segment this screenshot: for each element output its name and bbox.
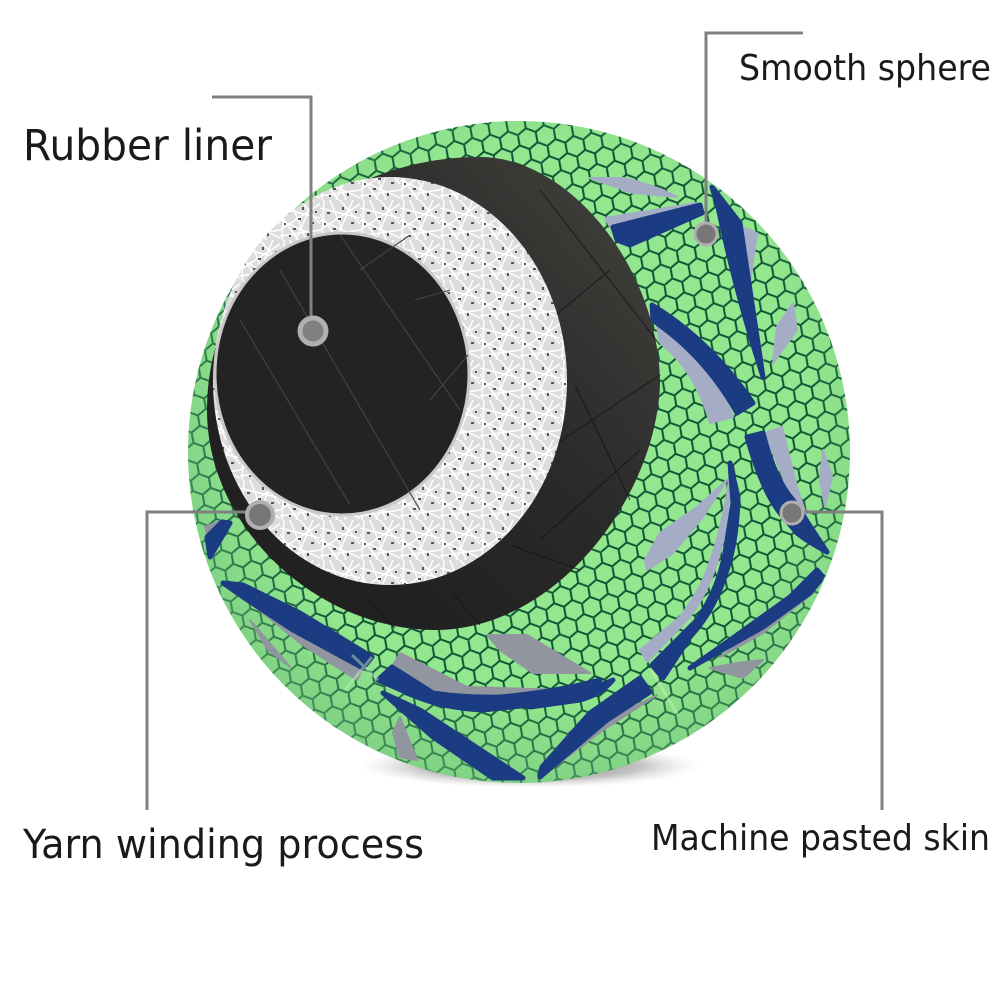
grey markings	[205, 520, 813, 770]
callout: machine pasted skin	[651, 502, 990, 859]
ball surface with hexagon pattern	[188, 121, 850, 783]
silver markings	[590, 178, 832, 662]
edge shading	[188, 121, 850, 783]
navy bands	[207, 187, 827, 778]
rubber panel seams	[367, 190, 660, 628]
callout: rubber liner	[23, 97, 326, 344]
callout: smooth sphere	[695, 33, 991, 245]
callout: rubber liner: Rubber liner	[23, 121, 272, 171]
panel seams	[345, 655, 678, 715]
panel seams on liner	[240, 235, 468, 510]
yarn winding layer	[213, 177, 567, 585]
callout: yarn winding process	[22, 502, 424, 868]
football	[188, 121, 850, 783]
callout: yarn winding process: Yarn winding process	[22, 822, 424, 868]
rubber bladder outer layer	[207, 157, 660, 630]
inner rubber liner	[215, 233, 469, 515]
navy and silver panel markings	[205, 178, 832, 778]
ground shadow	[360, 744, 700, 788]
